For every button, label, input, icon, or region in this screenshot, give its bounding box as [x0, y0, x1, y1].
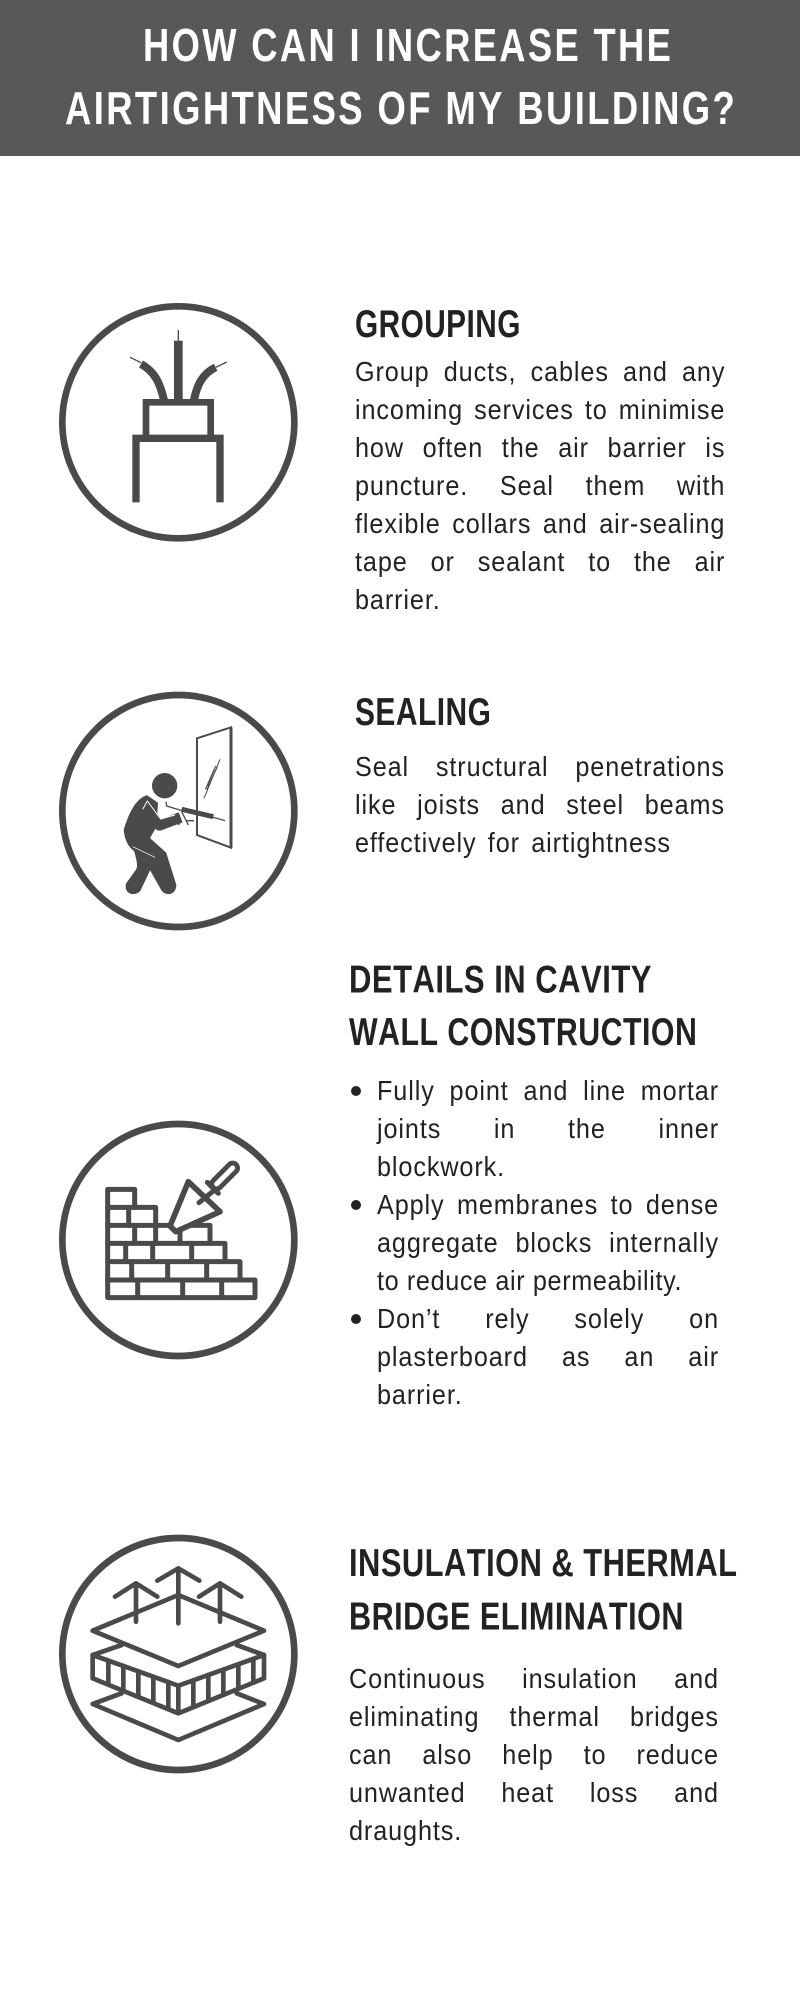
bullet list text: Fully point and line mortar: [377, 1075, 719, 1106]
bullet list text: plasterboard as an air: [377, 1341, 719, 1372]
text: grouping: how often the air barrier is: [355, 432, 725, 463]
heading: sealing: SEALING: [355, 691, 491, 734]
heading: details in cavity wall construction: DETAILS IN CAVITY: [349, 958, 652, 1002]
bullet list text: blockwork.: [377, 1151, 505, 1182]
bullet list text: joints in the inner: [377, 1113, 719, 1144]
text: grouping: tape or sealant to the air: [355, 546, 725, 577]
text: insulation: unwanted heat loss and: [349, 1777, 719, 1808]
panel: grouping: [59, 303, 725, 615]
bullet list text: Don’t rely solely on: [377, 1303, 719, 1334]
title text: [65, 19, 737, 134]
heading: details in cavity wall construction: [349, 958, 697, 1054]
text: insulation: draughts.: [349, 1815, 462, 1846]
text: grouping: incoming services to minimise: [355, 394, 725, 425]
text: sealing: like joists and steel beams: [355, 789, 725, 820]
text: grouping: flexible collars and air-sealing: [355, 508, 725, 539]
bullet marker: [351, 1200, 361, 1210]
icon: brick wall and trowel: [59, 1120, 298, 1360]
text: insulation: eliminating thermal bridges: [349, 1701, 719, 1732]
heading: details in cavity wall construction: WALL CONSTRUCTION: [349, 1010, 697, 1054]
panel: insulation and thermal bridge elimination: [59, 1534, 737, 1846]
title banner: [0, 0, 800, 156]
text: sealing: [355, 751, 725, 858]
text: grouping: Group ducts, cables and any: [355, 356, 725, 387]
text: insulation: Continuous insulation and: [349, 1663, 719, 1694]
bullet marker: [351, 1314, 361, 1324]
panel: sealing: [59, 691, 725, 930]
title text: HOW CAN I INCREASE THE: [143, 19, 673, 71]
text: grouping: [355, 356, 725, 615]
heading: insulation and thermal bridge elimination: [349, 1542, 737, 1638]
heading: insulation and thermal bridge elimination: INSULATION & THERMAL: [349, 1542, 737, 1585]
bullet list text: Apply membranes to dense: [377, 1189, 719, 1220]
panel: details in cavity wall construction: [59, 958, 719, 1410]
text: insulation: [349, 1663, 719, 1846]
bullet list text: aggregate blocks internally: [377, 1227, 719, 1258]
text: insulation: can also help to reduce: [349, 1739, 719, 1770]
icon: worker sealing: [59, 692, 298, 930]
icon: grouped cables: [59, 303, 298, 542]
bullet list text: [376, 1075, 719, 1410]
title text: AIRTIGHTNESS OF MY BUILDING?: [65, 82, 737, 134]
heading: insulation and thermal bridge elimination: BRIDGE ELIMINATION: [349, 1595, 684, 1638]
text: sealing: Seal structural penetrations: [355, 751, 725, 782]
text: grouping: barrier.: [355, 584, 441, 615]
text: grouping: puncture. Seal them with: [355, 470, 725, 501]
bullet list text: barrier.: [377, 1379, 463, 1410]
icon: insulation layers with arrows: [59, 1534, 298, 1774]
bullet marker: [351, 1086, 361, 1096]
text: sealing: effectively for airtightness: [355, 827, 671, 858]
bullet list text: to reduce air permeability.: [377, 1265, 682, 1296]
heading: grouping: GROUPING: [355, 303, 521, 346]
